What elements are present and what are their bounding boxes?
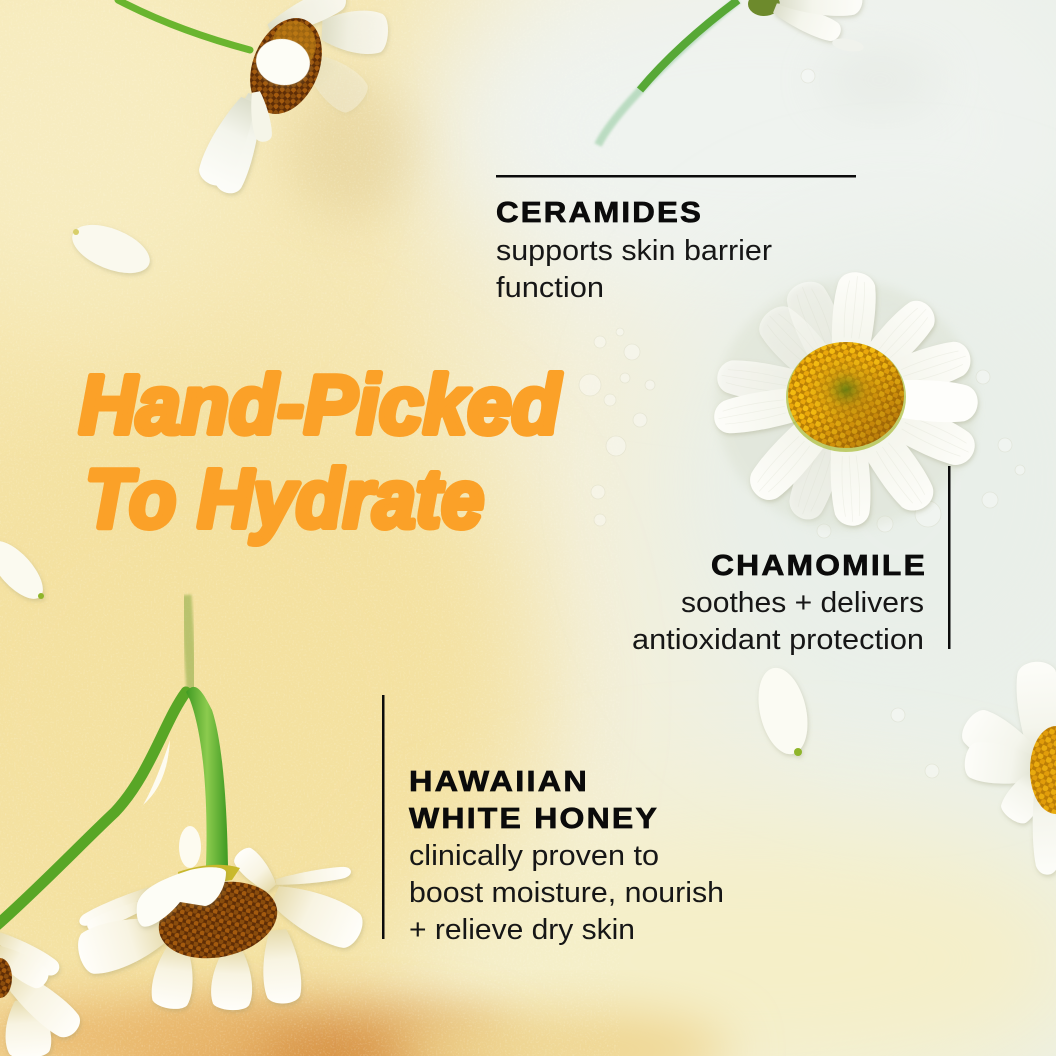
flower: bottom left corner daisy <box>0 927 86 1056</box>
flower: top right stem and petals <box>598 0 865 145</box>
bubbles <box>579 69 1025 778</box>
flower: right edge daisy <box>955 660 1056 875</box>
petal: loose left edge <box>0 533 52 607</box>
petal: loose right centre <box>751 663 815 759</box>
petal: loose top left <box>65 215 157 283</box>
callout: chamomile: CHAMOMILE <box>711 550 927 582</box>
callout: ceramides: function <box>496 272 604 304</box>
callout: chamomile: antioxidant protection <box>632 624 924 656</box>
callout: hawaiian white honey: boost moisture, nourish <box>409 877 724 909</box>
callout: chamomile: soothes + delivers <box>681 587 924 619</box>
callout: ceramides: CERAMIDES <box>496 197 703 229</box>
callout: hawaiian white honey: WHITE HONEY <box>409 803 659 835</box>
callout: hawaiian white honey <box>382 695 724 946</box>
callout: ceramides: supports skin barrier <box>496 235 772 267</box>
callout: ceramides <box>496 175 856 304</box>
callout: chamomile <box>632 466 950 656</box>
callout: hawaiian white honey: clinically proven to <box>409 840 659 872</box>
heading: Hand-Picked To Hydrate: Hand-Picked <box>79 358 562 451</box>
callout: hawaiian white honey: HAWAIIAN <box>409 766 589 798</box>
flower: top stem and daisy <box>118 0 389 197</box>
flower: bottom stems and daisy <box>0 595 369 1011</box>
callout: hawaiian white honey: + relieve dry skin <box>409 914 635 946</box>
heading: Hand-Picked To Hydrate <box>79 358 562 545</box>
heading: Hand-Picked To Hydrate: To Hydrate <box>85 452 484 545</box>
flower: large chamomile <box>711 270 981 530</box>
